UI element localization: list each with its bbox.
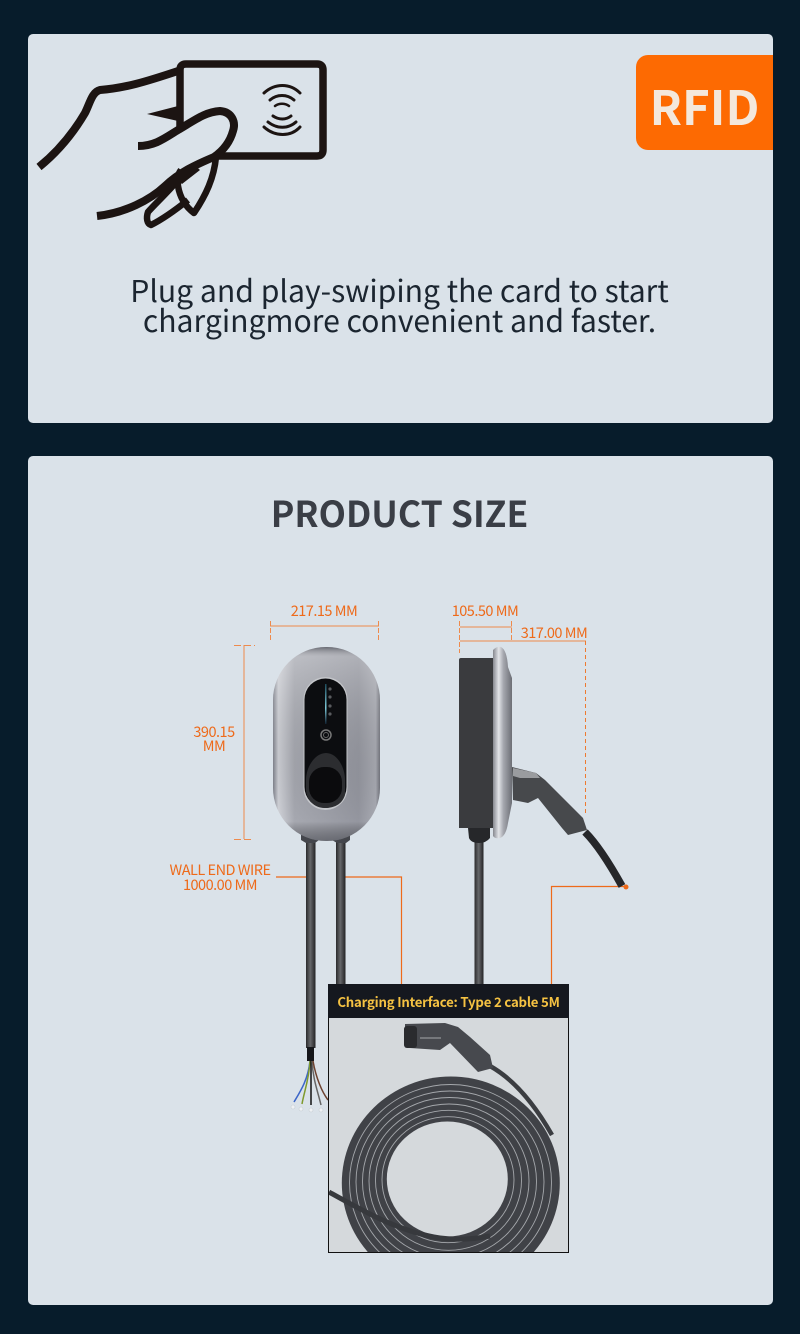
label: width dimension: 217.15 MM (291, 600, 357, 621)
icon: hand holding RFID card (36, 60, 327, 228)
label: wall end wire: 1000.00 MM (183, 874, 257, 895)
label: height dimension: MM (203, 735, 225, 756)
inset: charging cable (328, 984, 569, 1253)
heading: product size: PRODUCT SIZE (271, 487, 528, 538)
label: overall depth dimension: 317.00 MM (521, 622, 587, 643)
badge: RFID (636, 55, 773, 150)
text block: RFID description (130, 267, 669, 340)
charger side view (459, 647, 622, 988)
panel: RFID (28, 34, 773, 423)
label: depth dimension: 105.50 MM (452, 600, 518, 621)
charger front view (273, 647, 380, 1112)
badge: RFID: RFID (650, 70, 759, 139)
label: height dimension (193, 721, 235, 756)
inset heading: charging interface: Charging Interface: Type 2 cable 5M (337, 992, 560, 1011)
label: wall end wire (169, 859, 271, 895)
label: height dimension: 390.15 (193, 721, 235, 742)
label: wall end wire: WALL END WIRE (169, 859, 271, 880)
charger illustrations and cable inset (273, 647, 626, 1253)
text block: RFID description: chargingmore convenient and faster. (143, 296, 656, 340)
panel: product size (28, 456, 773, 1305)
text block: RFID description: Plug and play-swiping the card to start (130, 267, 669, 311)
